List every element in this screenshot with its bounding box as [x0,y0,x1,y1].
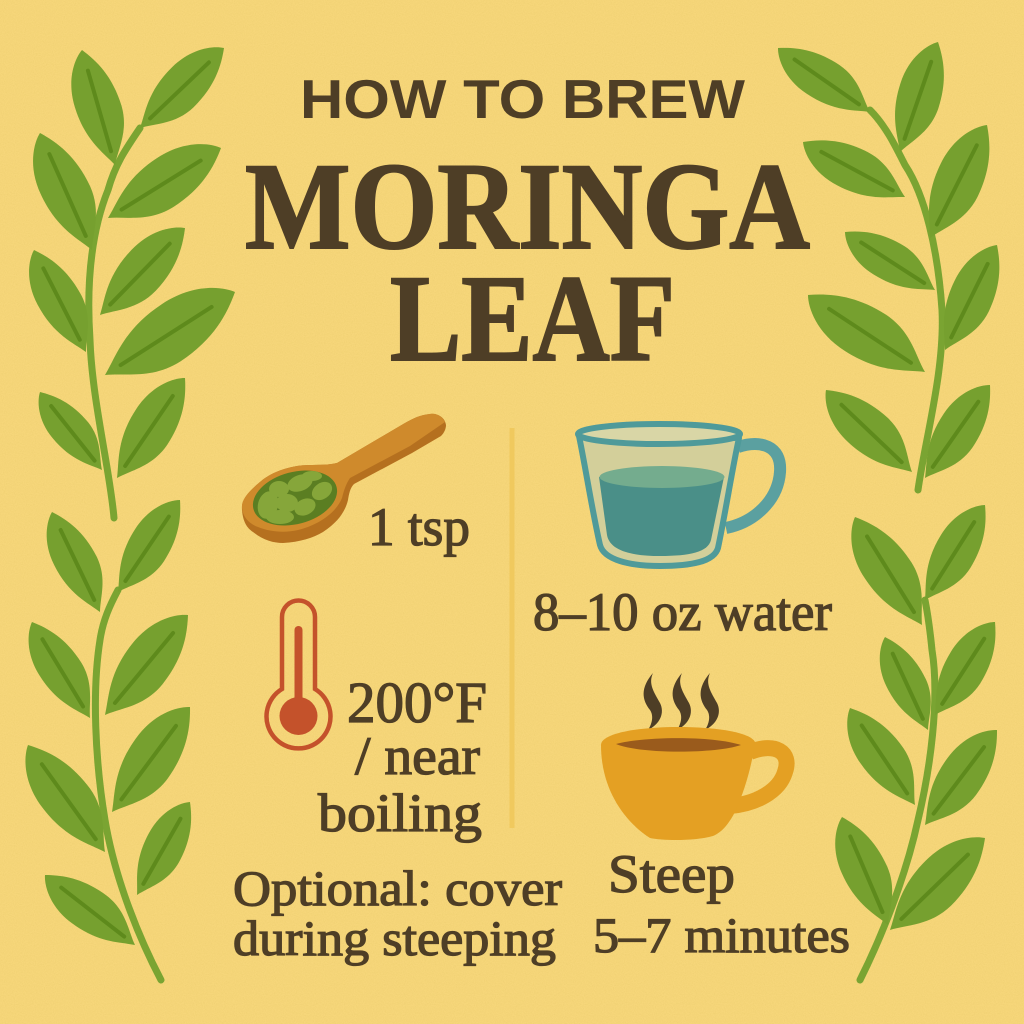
stem [870,110,942,490]
cup handle [730,748,787,806]
left sprig, lower [8,488,210,980]
label: 1 tsp: 1 tsp [368,497,470,557]
stem [89,128,140,518]
moringa leaves in spoon [247,462,343,534]
label: temperature: / near [355,726,480,786]
icon: glass measuring cup [578,424,780,566]
cup body [601,727,755,840]
label: water amount: 8–10 oz water [533,582,832,642]
right sprig, lower [822,494,1015,980]
center divider [510,428,514,828]
heading: moringa: MORINGA [245,138,810,275]
icon: thermometer [266,600,330,748]
heading: leaf: LEAF [390,250,675,387]
right sprig, upper [766,31,1017,490]
stem [860,600,935,980]
cup rim [578,424,740,444]
leaves [766,31,1017,490]
note: optional cover: during steeping [233,910,556,966]
leaves [822,494,1015,948]
label: temperature: 200°F [347,670,487,735]
glass body [579,436,739,566]
cup handle [726,444,780,528]
leaves [15,32,251,491]
label: steep time [593,844,850,963]
left sprig, upper [15,32,251,518]
leaves [8,488,210,962]
icon: tea cup [601,727,787,840]
note: optional cover: Optional: cover [233,860,562,916]
icon: steam [644,673,719,730]
heading: how to brew: HOW TO BREW [300,68,745,130]
water [599,477,724,556]
title [245,68,810,387]
stem [95,590,161,980]
label: temperature [318,670,487,843]
icon: spoon with moringa [242,414,446,543]
label: steep time: 5–7 minutes [593,907,850,963]
label: temperature: boiling [318,783,482,843]
note: optional cover [233,860,562,966]
tea surface [616,738,741,752]
label: steep time: Steep [608,844,735,904]
